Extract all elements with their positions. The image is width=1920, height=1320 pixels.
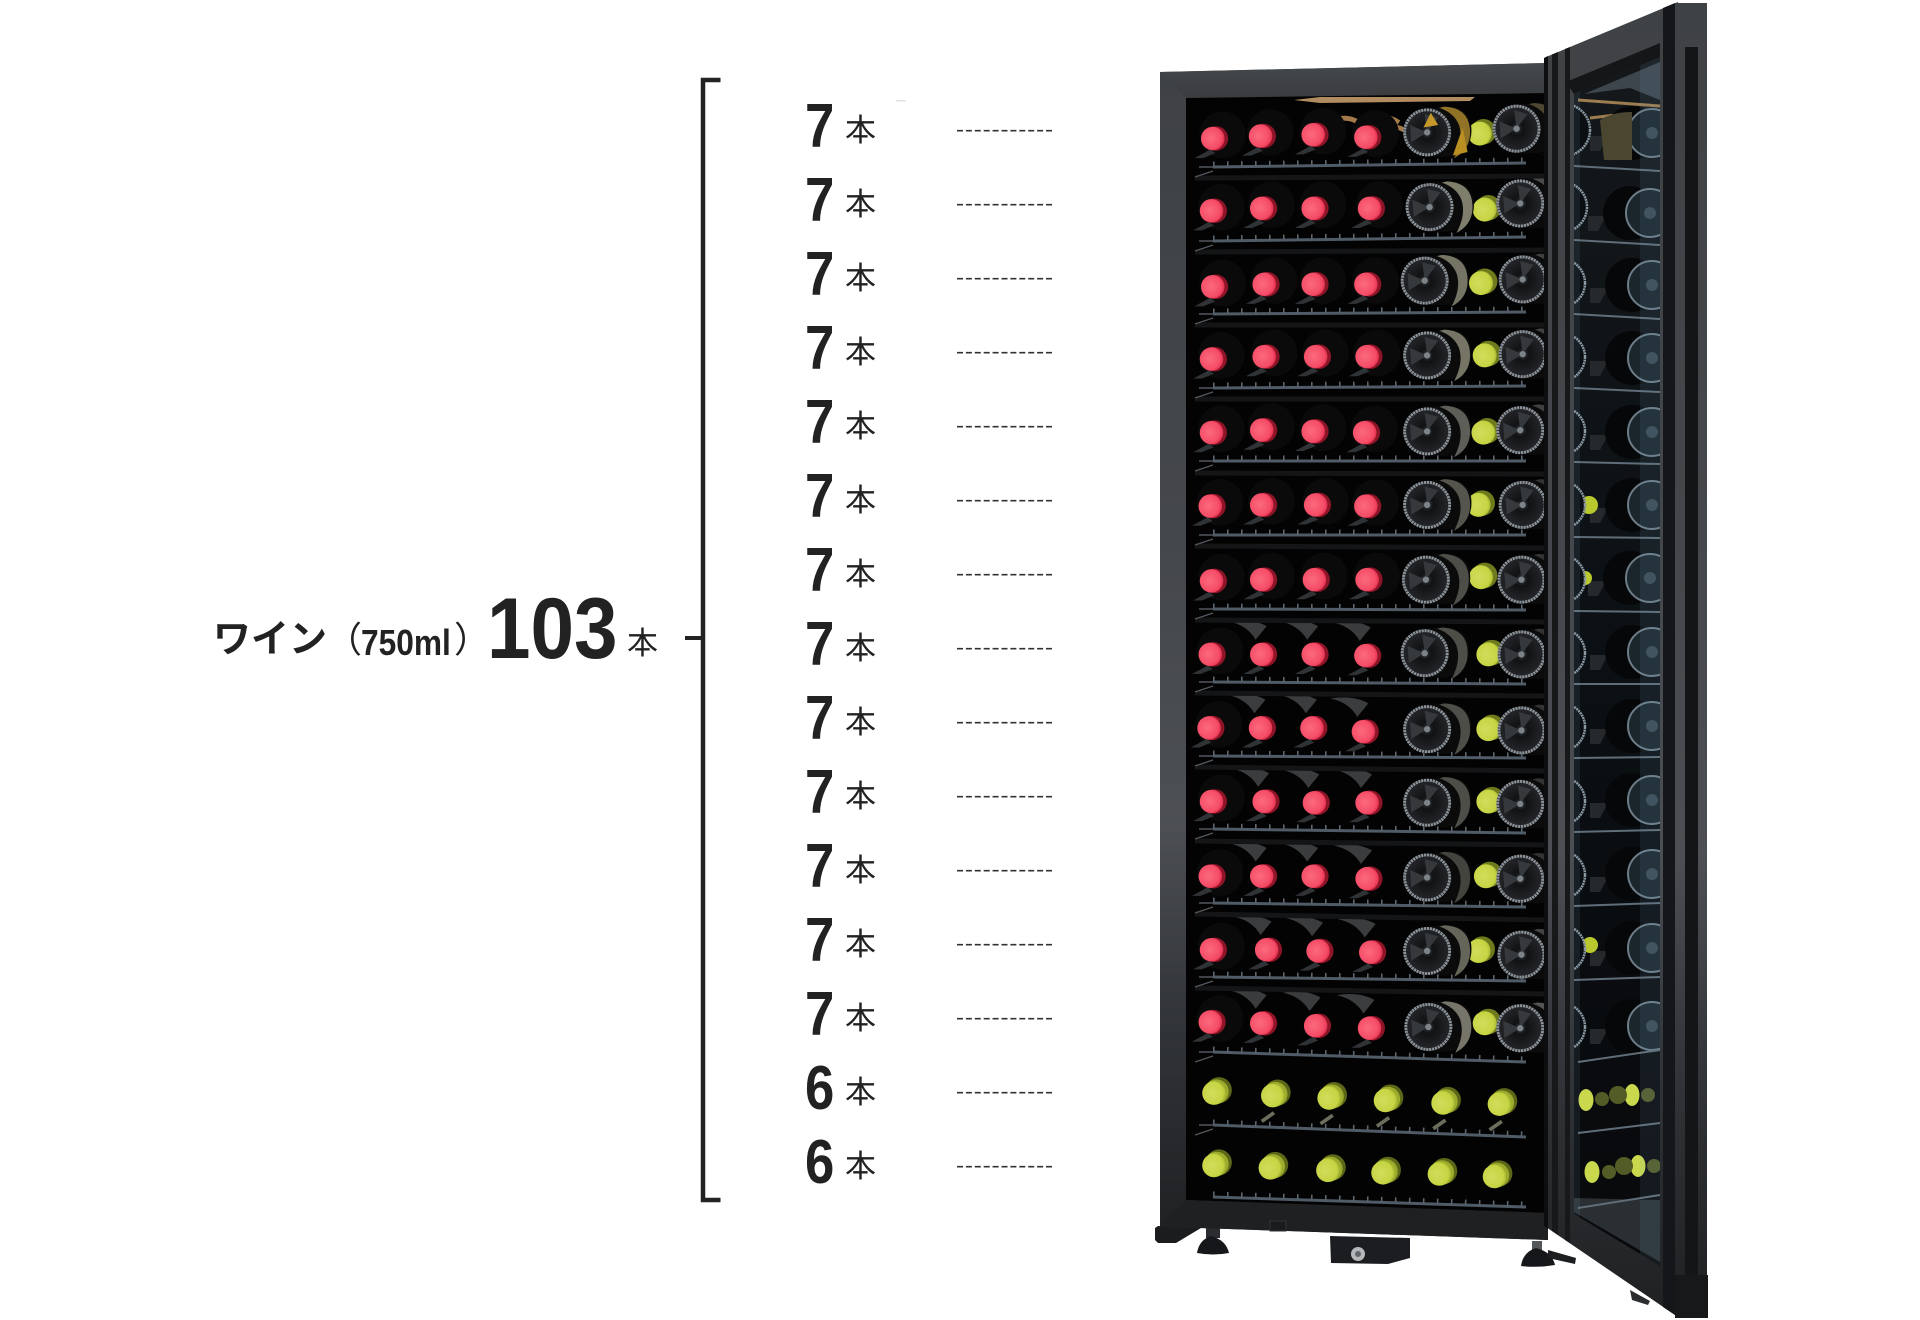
row 7 count: 本: [845, 557, 876, 592]
panel: wire shelves: [1195, 160, 1545, 1207]
row 2 bottles: [1193, 178, 1565, 233]
heading: total wine capacity: ）: [454, 611, 490, 663]
row 13 count: 本: [845, 1001, 876, 1036]
row 15 count: [805, 1128, 1053, 1197]
row 4 count: 7: [805, 314, 834, 383]
row 3 bottles: [1194, 254, 1567, 306]
top light strip: [1294, 97, 1475, 103]
row 2 count: 7: [805, 166, 834, 235]
row 10 count: 7: [805, 758, 834, 827]
row 13 bottles: [1192, 989, 1565, 1054]
row 11 bottles: [1192, 842, 1565, 904]
row 4 count: 本: [845, 335, 876, 370]
row 12 bottles: [1193, 916, 1566, 980]
row 5 count: 本: [845, 409, 876, 444]
row 8 count: 7: [805, 610, 834, 679]
row 2 count: 本: [845, 187, 876, 222]
row 14 count: 6: [805, 1054, 834, 1123]
panel: fridge body: [1160, 63, 1548, 1240]
row 12 count: [805, 906, 1053, 975]
row 11 count: 本: [845, 853, 876, 888]
row 6 bottles: [1192, 478, 1567, 531]
row 11 count: [805, 832, 1053, 901]
panel: open glass door: [1537, 2, 1708, 1318]
heading: total wine capacity: 750ml: [361, 623, 451, 663]
row 8 bottles: [1192, 620, 1566, 680]
row 3 count: [805, 240, 1053, 309]
row 13 count: [805, 980, 1053, 1049]
row 10 count: [805, 758, 1053, 827]
row 3 count: 本: [845, 261, 876, 296]
row 1 count: 本: [845, 113, 876, 148]
row 14 bottles: [1202, 1077, 1517, 1130]
row 13 count: 7: [805, 980, 834, 1049]
door glass reflections: [1574, 57, 1660, 1266]
heading: total wine capacity: 本: [627, 626, 658, 661]
row 5 count: [805, 388, 1053, 457]
row 6 count: 本: [845, 483, 876, 518]
row 7 bottles: [1193, 553, 1566, 605]
row 9 count: 7: [805, 684, 834, 753]
heading: total wine capacity: 103: [487, 582, 618, 677]
heading: total wine capacity: [213, 582, 658, 677]
row 9 count: [805, 684, 1053, 753]
panel: wine bottles: [1191, 103, 1567, 1188]
heading: total wine capacity: ワイン: [213, 608, 327, 663]
row 14 count: 本: [845, 1075, 876, 1110]
row 15 count: 6: [805, 1128, 834, 1197]
row 10 count: 本: [845, 779, 876, 814]
row 9 bottles: [1191, 694, 1566, 756]
row 10 bottles: [1193, 767, 1565, 830]
row 6 count: [805, 462, 1053, 531]
row 1 count: 7: [805, 92, 834, 161]
row 14 count: [805, 1054, 1053, 1123]
row 15 count: 本: [845, 1149, 876, 1184]
row 4 bottles: [1193, 328, 1567, 381]
row 11 count: 7: [805, 832, 834, 901]
row 15 bottles: [1202, 1149, 1512, 1188]
door side strip: [1675, 3, 1708, 1318]
icon: fridge feet and lock: [1155, 1226, 1650, 1305]
heading: total wine capacity: （: [326, 611, 362, 663]
row 12 count: 本: [845, 927, 876, 962]
row 7 count: [805, 536, 1053, 605]
row 8 count: 本: [845, 631, 876, 666]
row 1 count: [805, 92, 1053, 161]
row 7 count: 7: [805, 536, 834, 605]
row 4 count: [805, 314, 1053, 383]
row 12 count: 7: [805, 906, 834, 975]
row 1 bottles: [1194, 103, 1561, 158]
bracket: [685, 80, 720, 1200]
row 6 count: 7: [805, 462, 834, 531]
row 2 count: [805, 166, 1053, 235]
row 3 count: 7: [805, 240, 834, 309]
row 9 count: 本: [845, 705, 876, 740]
row 8 count: [805, 610, 1053, 679]
row 5 count: 7: [805, 388, 834, 457]
row 5 bottles: [1193, 403, 1565, 457]
